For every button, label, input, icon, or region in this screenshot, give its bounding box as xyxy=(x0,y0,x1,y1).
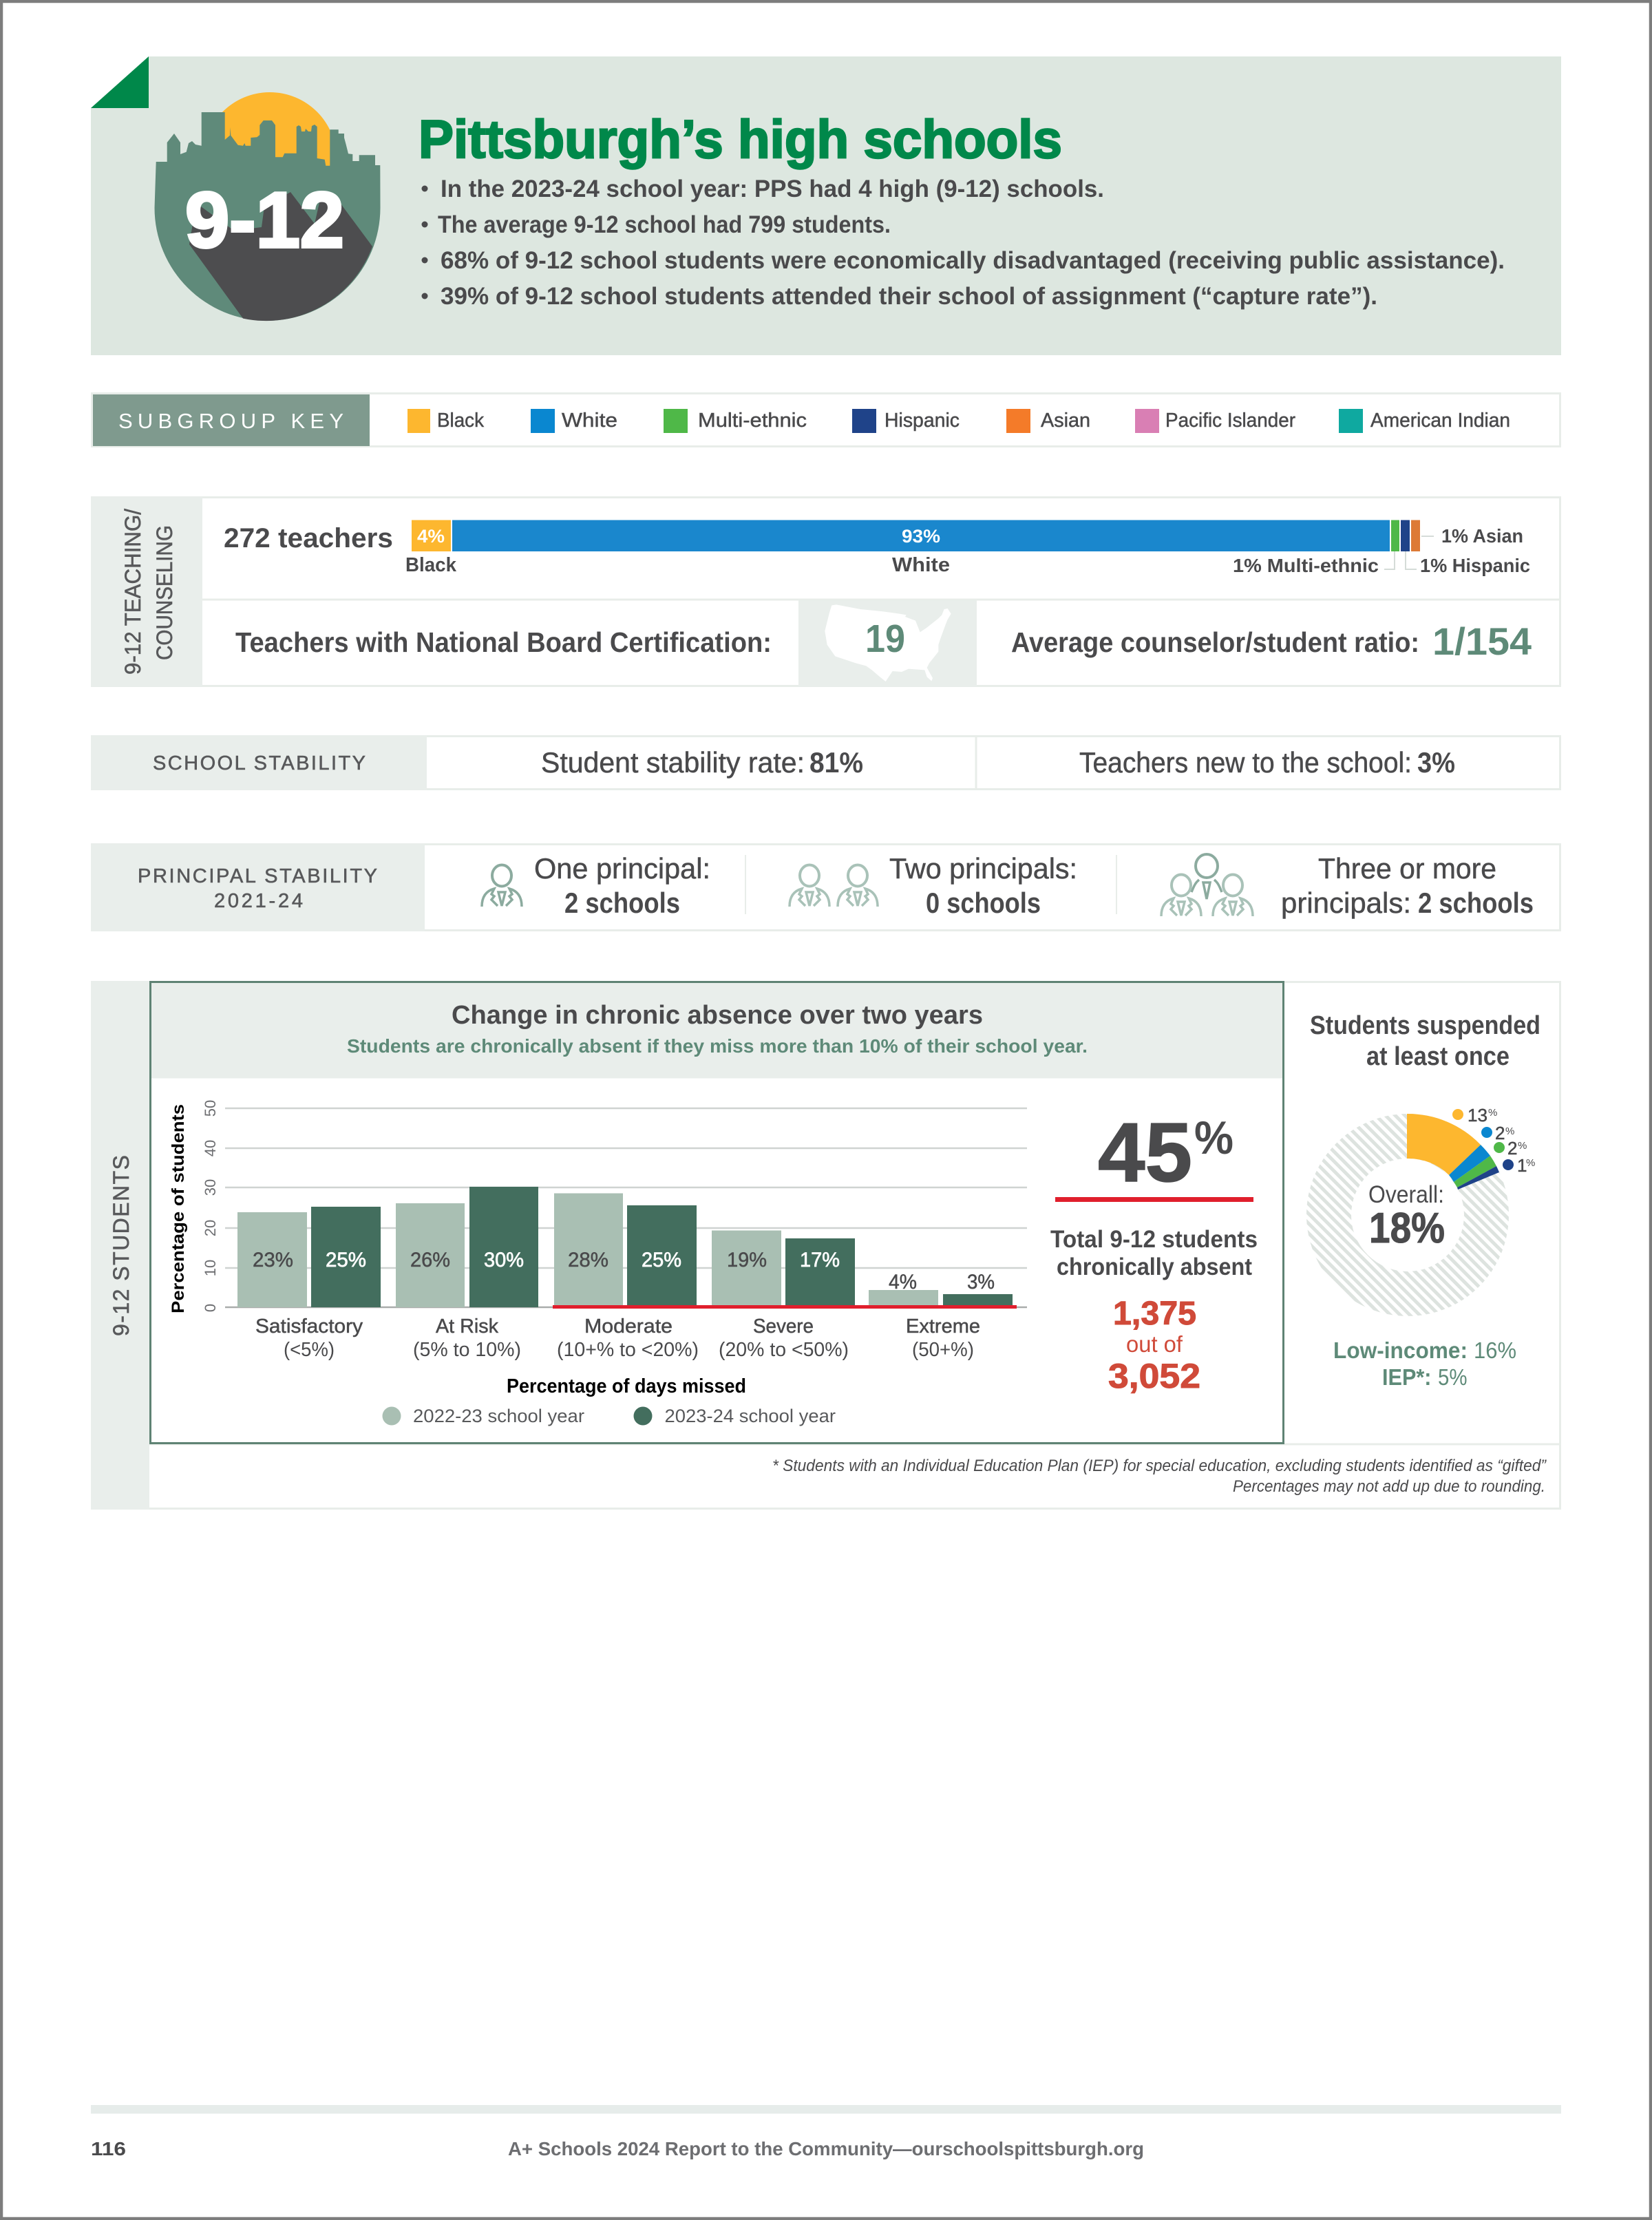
panel: chronic absence xyxy=(150,982,1283,1443)
stat: student stability: 81% xyxy=(809,746,863,779)
icon: Pittsburgh skyline badge: 9-12 xyxy=(185,177,344,264)
bar value labels: 19% xyxy=(727,1249,767,1271)
category labels: (50+%) xyxy=(912,1339,974,1361)
footer bar xyxy=(91,2105,1561,2113)
icon: US map with count xyxy=(798,600,977,686)
text block: summary bullets: 68% of 9-12 school students were economically disadvantaged (receiving public assistance). xyxy=(441,247,1505,274)
legend: Pacific Islander: Pacific Islander xyxy=(1165,410,1295,432)
category labels: Severe xyxy=(753,1315,814,1338)
stat: low-income and IEP suspensions xyxy=(1333,1338,1516,1390)
legend: Hispanic xyxy=(852,409,960,433)
stat: two principals: Two principals: xyxy=(889,852,1077,885)
y axis title: Percentage of students xyxy=(169,1104,188,1313)
category labels: Moderate xyxy=(584,1315,673,1338)
stat: three or more principals: Three or more xyxy=(1318,852,1496,885)
stat: 45 percent chronically absent: out of xyxy=(1126,1331,1183,1357)
chart legend: 2023-24 school year xyxy=(665,1406,836,1426)
footnote xyxy=(772,1457,1547,1496)
footnote: * Students with an Individual Education Plan (IEP) for special education, excluding students identified as “gifted” xyxy=(772,1457,1547,1475)
legend: Asian: Asian xyxy=(1041,410,1090,432)
panel: school stability xyxy=(91,735,1560,790)
label: principal stability xyxy=(138,865,377,912)
icon: two principals xyxy=(790,865,878,907)
heading: students suspended: Students suspended xyxy=(1310,1011,1540,1040)
board certification label: Teachers with National Board Certification: xyxy=(235,626,772,658)
legend: Hispanic: Hispanic xyxy=(885,410,960,432)
counselor ratio: 1/154 xyxy=(1432,620,1532,663)
donut centre label: 18% xyxy=(1369,1205,1445,1252)
corner fold xyxy=(91,56,149,108)
donut centre label: Overall: xyxy=(1368,1181,1444,1208)
legend: Black xyxy=(407,409,484,433)
bar value labels: 26% xyxy=(410,1249,450,1271)
donut slice labels: % xyxy=(1518,1140,1527,1152)
y axis ticks: 40 xyxy=(202,1140,219,1156)
bar labels: White xyxy=(892,554,950,576)
stat: 45 percent chronically absent xyxy=(1050,1106,1258,1395)
bar value labels: 25% xyxy=(326,1249,366,1271)
bar labels: 1% Hispanic xyxy=(1420,555,1530,576)
footnote: Percentages may not add up due to rounding. xyxy=(1233,1477,1545,1496)
text block: summary bullets: 39% of 9-12 school students attended their school of assignment (“capture rate”). xyxy=(441,283,1377,310)
bar value labels: 4% xyxy=(889,1271,917,1293)
bar labels: Black xyxy=(405,554,457,576)
legend: White xyxy=(531,409,617,433)
stat: student stability: Student stability rate: xyxy=(541,746,805,779)
donut slice labels: 1 xyxy=(1517,1155,1527,1176)
legend: Black: Black xyxy=(437,410,484,432)
text block: summary bullets: In the 2023-24 school year: PPS had 4 high (9-12) schools. xyxy=(441,176,1104,202)
stat: 45 percent chronically absent: 45 xyxy=(1098,1106,1192,1199)
bar value labels: 23% xyxy=(253,1249,293,1271)
side label xyxy=(120,509,177,675)
stat: new teachers: 3% xyxy=(1417,746,1455,779)
text block: summary bullets: The average 9-12 school had 799 students. xyxy=(438,211,891,238)
stat: one principal xyxy=(534,852,710,919)
y axis ticks: 10 xyxy=(202,1260,219,1276)
category labels: (<5%) xyxy=(284,1339,335,1361)
y axis ticks xyxy=(202,1100,219,1312)
category labels: (10+% to <20%) xyxy=(557,1339,699,1361)
bar value labels: 3% xyxy=(967,1271,995,1293)
stacked bar: teacher demographics xyxy=(412,520,1420,551)
donut slice labels xyxy=(1452,1105,1535,1176)
heading: students suspended: at least once xyxy=(1366,1042,1510,1071)
page number: 116 xyxy=(91,2138,126,2159)
stat: one principal: 2 schools xyxy=(564,887,680,919)
stat: 45 percent chronically absent: Total 9-12 students xyxy=(1050,1226,1258,1253)
stat: 45 percent chronically absent: % xyxy=(1194,1112,1233,1164)
teacher count: 272 teachers xyxy=(224,523,393,553)
bar value labels xyxy=(253,1249,995,1293)
bars xyxy=(237,1187,1013,1307)
donut chart: suspensions xyxy=(1328,1105,1535,1294)
red chronic-absence underline xyxy=(553,1305,1017,1309)
bar value labels: 30% xyxy=(484,1249,524,1271)
panel: 9-12 students xyxy=(91,981,1560,1510)
heading: students suspended xyxy=(1310,1011,1540,1071)
text block: summary bullets xyxy=(421,176,1505,310)
legend: Multi-ethnic: Multi-ethnic xyxy=(698,410,807,432)
counselor ratio xyxy=(1011,620,1532,663)
label: principal stability: 2021-24 xyxy=(214,890,303,912)
chart legend xyxy=(383,1406,836,1426)
counselor ratio: Average counselor/student ratio: xyxy=(1011,626,1419,658)
stat: low-income and IEP suspensions: 5% xyxy=(1438,1364,1468,1390)
heading: subgroup key: SUBGROUP KEY xyxy=(118,409,343,433)
stat: one principal: One principal: xyxy=(534,852,710,885)
subheading: Students are chronically absent if they miss more than 10% of their school year. xyxy=(347,1035,1088,1057)
category labels: Extreme xyxy=(906,1315,980,1338)
label: principal stability: PRINCIPAL STABILITY xyxy=(138,865,377,887)
y axis ticks: 0 xyxy=(202,1304,219,1312)
footer credit: A+ Schools 2024 Report to the Community—ourschoolspittsburgh.org xyxy=(508,2138,1144,2159)
stacked bar: teacher demographics: 4% xyxy=(417,526,445,547)
icon: Pittsburgh skyline badge xyxy=(154,92,380,321)
title: Pittsburgh’s high schools xyxy=(419,109,1062,169)
donut slice labels: % xyxy=(1488,1107,1497,1119)
stat: three or more principals xyxy=(1281,852,1534,919)
heading: chronic absence: Change in chronic absence over two years xyxy=(452,1001,983,1030)
bar labels xyxy=(405,525,1530,576)
side label: 9-12 TEACHING/ xyxy=(120,509,145,675)
stat: low-income and IEP suspensions: Low-income: xyxy=(1333,1338,1468,1363)
bar value labels: 17% xyxy=(800,1249,840,1271)
donut slice labels: 13 xyxy=(1468,1105,1487,1125)
bar labels: 1% Multi-ethnic xyxy=(1233,555,1379,576)
stacked bar: teacher demographics: 93% xyxy=(902,526,940,547)
stat: two principals xyxy=(889,852,1077,919)
y axis ticks: 20 xyxy=(202,1220,219,1236)
legend: Asian xyxy=(1006,409,1090,433)
donut slice labels: % xyxy=(1526,1157,1535,1169)
panel: teaching and counseling xyxy=(91,496,1560,686)
y axis ticks: 30 xyxy=(202,1179,219,1196)
panel: principal stability xyxy=(91,843,1560,931)
stat: three or more principals: 2 schools xyxy=(1418,887,1534,919)
category labels: (5% to 10%) xyxy=(413,1339,521,1361)
category labels: At Risk xyxy=(436,1315,498,1338)
stat: 45 percent chronically absent: 1,375 xyxy=(1113,1296,1196,1332)
bar value labels: 28% xyxy=(568,1249,608,1271)
stat: low-income and IEP suspensions: IEP*: xyxy=(1382,1364,1432,1390)
category labels: Satisfactory xyxy=(255,1315,363,1338)
chart legend: 2022-23 school year xyxy=(413,1406,584,1426)
stat: two principals: 0 schools xyxy=(926,887,1041,919)
legend: White: White xyxy=(562,410,617,432)
side label: COUNSELING xyxy=(152,525,177,660)
stat: new teachers: Teachers new to the school: xyxy=(1079,746,1412,779)
legend: American Indian: American Indian xyxy=(1370,410,1510,432)
x axis title: Percentage of days missed xyxy=(507,1375,746,1397)
side label: 9-12 STUDENTS xyxy=(109,1155,134,1336)
icon: US map with count: 19 xyxy=(865,617,905,661)
icon: one principal xyxy=(482,865,522,907)
panel: subgroup key xyxy=(92,394,1560,446)
panel: header xyxy=(91,56,1561,355)
stat: 45 percent chronically absent: 3,052 xyxy=(1108,1357,1200,1395)
bar labels: 1% Asian xyxy=(1441,525,1523,547)
stat: low-income and IEP suspensions: 16% xyxy=(1474,1338,1516,1363)
bar value labels: 25% xyxy=(642,1249,681,1271)
donut centre label xyxy=(1368,1181,1445,1252)
category labels: (20% to <50%) xyxy=(719,1339,849,1361)
icon: three principals xyxy=(1161,854,1253,916)
bar chart: chronic absence xyxy=(169,1100,1027,1426)
legend: Multi-ethnic xyxy=(664,409,807,433)
label: school stability: SCHOOL STABILITY xyxy=(153,752,366,774)
donut slice labels: 2 xyxy=(1495,1123,1505,1143)
donut slice labels: % xyxy=(1505,1125,1514,1137)
category labels xyxy=(255,1315,980,1361)
stat: 45 percent chronically absent: chronically absent xyxy=(1057,1254,1252,1280)
stat: three or more principals: principals: xyxy=(1281,887,1411,919)
y axis ticks: 50 xyxy=(202,1100,219,1117)
donut slice labels: 2 xyxy=(1507,1138,1517,1159)
